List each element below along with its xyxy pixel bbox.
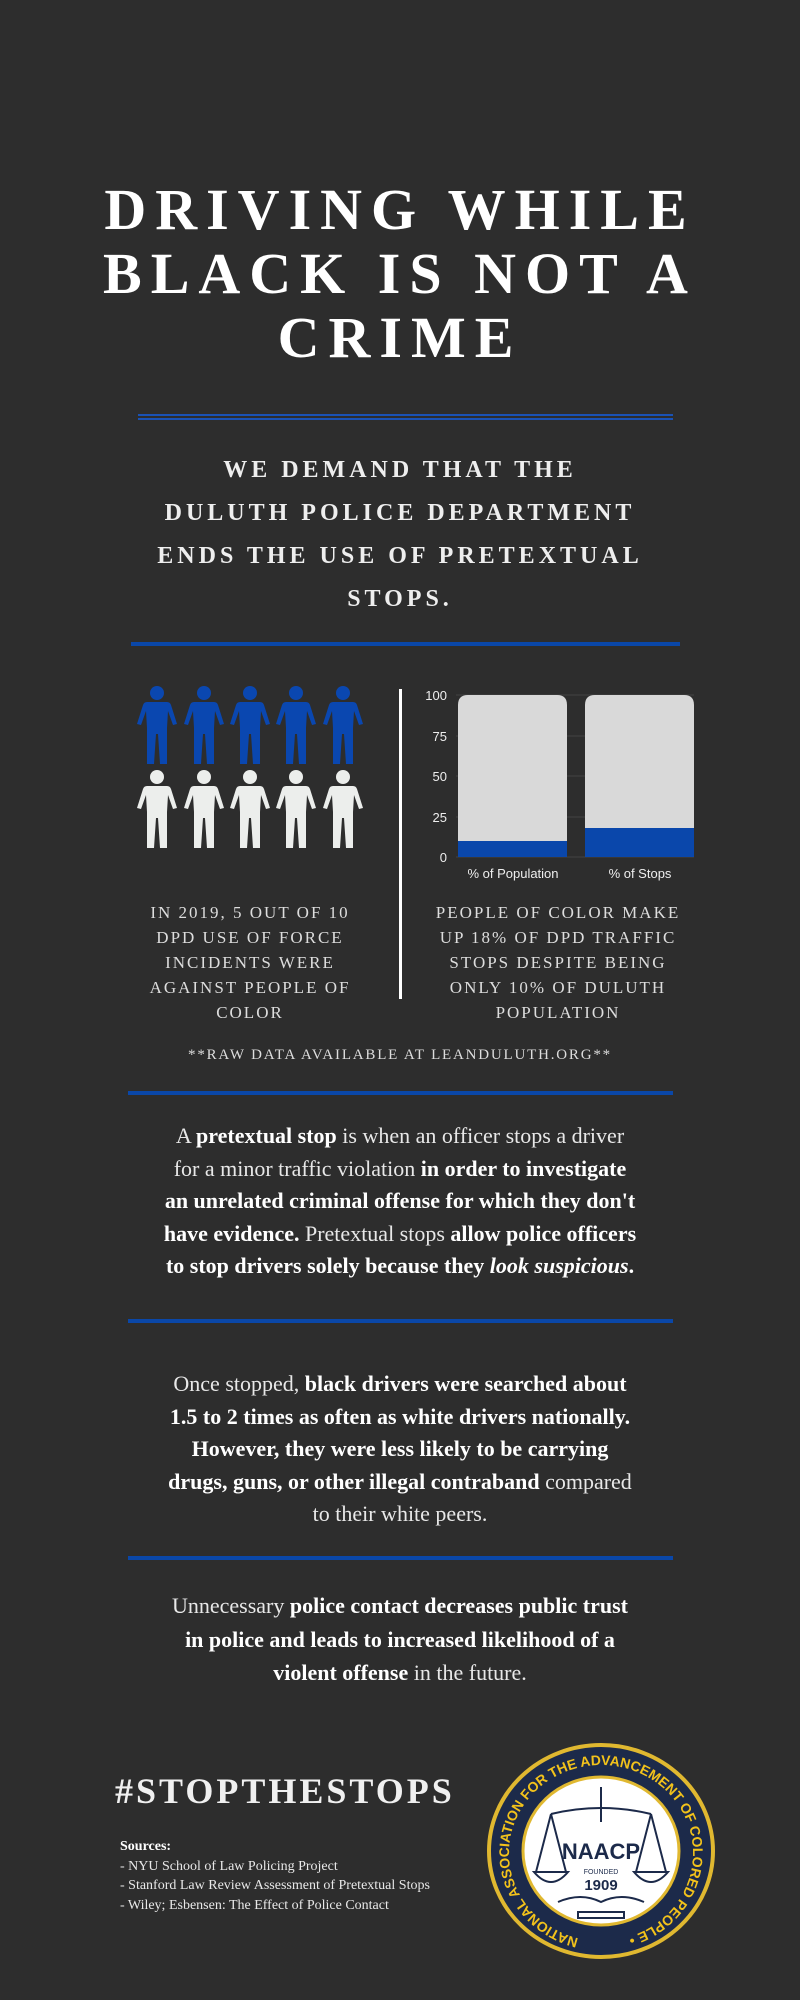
title [103, 177, 697, 370]
paragraph: search rates: Once stopped, black drivers were searched about [173, 1371, 627, 1396]
subtitle: DULUTH POLICE DEPARTMENT [165, 500, 635, 526]
subtitle: WE DEMAND THAT THE [223, 457, 577, 483]
caption left [150, 903, 350, 1022]
paragraph: pretextual stop: an unrelated criminal offense for which they don't [165, 1188, 635, 1213]
title: BLACK IS NOT A [103, 241, 697, 306]
caption right: UP 18% OF DPD TRAFFIC [440, 928, 676, 947]
paragraph: pretextual stop: to stop drivers solely because they look suspicious. [166, 1253, 634, 1278]
title: CRIME [278, 305, 522, 370]
sources: - NYU School of Law Policing Project [120, 1858, 338, 1874]
bar chart: % of Population [467, 866, 559, 881]
bar chart: 25 [433, 810, 447, 825]
caption left: COLOR [216, 1003, 284, 1022]
paragraph: pretextual stop: for a minor traffic violation in order to investigate [174, 1156, 626, 1180]
icon: people pictogram [137, 686, 363, 848]
raw data note: **RAW DATA AVAILABLE AT LEANDULUTH.ORG** [188, 1047, 612, 1063]
icon: NAACP seal: FOUNDED [584, 1869, 618, 1876]
sources [120, 1839, 430, 1912]
sources: - Stanford Law Review Assessment of Pretextual Stops [120, 1878, 430, 1893]
paragraph: public trust: violent offense in the future. [273, 1660, 527, 1685]
caption right [436, 903, 680, 1022]
caption left: DPD USE OF FORCE [156, 928, 344, 947]
paragraph: pretextual stop [164, 1123, 636, 1278]
caption right: POPULATION [496, 1003, 620, 1022]
bar chart: 50 [433, 769, 447, 784]
sources: - Wiley; Esbensen: The Effect of Police Contact [120, 1898, 389, 1912]
paragraph: public trust: in police and leads to increased likelihood of a [185, 1626, 615, 1652]
sources: Sources: [120, 1839, 171, 1854]
paragraph: search rates [168, 1371, 632, 1526]
bar chart: 75 [433, 729, 447, 744]
vertical divider [399, 689, 402, 999]
caption right: STOPS DESPITE BEING [449, 953, 667, 972]
caption right: ONLY 10% OF DULUTH [450, 978, 666, 997]
hashtag: #STOPTHESTOPS [115, 1771, 455, 1811]
bar chart: % of Stops [609, 866, 672, 881]
subtitle [157, 457, 643, 612]
paragraph: search rates: However, they were less likely to be carrying [192, 1436, 608, 1461]
bar chart: 100 [425, 688, 447, 703]
icon: NAACP seal: NAACP [562, 1839, 640, 1864]
paragraph: pretextual stop: A pretextual stop is when an officer stops a driver [176, 1123, 624, 1148]
title: DRIVING WHILE [104, 177, 696, 242]
paragraph: search rates: 1.5 to 2 times as often as white drivers nationally. [170, 1404, 630, 1428]
paragraph: search rates: to their white peers. [313, 1501, 487, 1526]
paragraph: public trust: Unnecessary police contact decreases public trust [172, 1593, 628, 1618]
caption left: AGAINST PEOPLE OF [150, 978, 350, 997]
caption right: PEOPLE OF COLOR MAKE [436, 903, 680, 922]
subtitle: STOPS. [347, 586, 453, 612]
double divider [138, 414, 673, 420]
icon: NAACP seal: NATIONAL ASSOCIATION FOR THE ADVANCEMENT OF COLORED PEOPLE • [499, 1755, 703, 1948]
caption left: IN 2019, 5 OUT OF 10 [150, 903, 350, 922]
subtitle: ENDS THE USE OF PRETEXTUAL [157, 543, 643, 569]
bar chart: 0 [440, 850, 447, 865]
paragraph: search rates: drugs, guns, or other illegal contraband compared [168, 1468, 632, 1494]
paragraph: pretextual stop: have evidence. Pretextual stops allow police officers [164, 1220, 636, 1246]
bar chart [425, 688, 694, 881]
icon: NAACP seal: 1909 [584, 1877, 618, 1894]
paragraph: public trust [172, 1593, 628, 1685]
caption left: INCIDENTS WERE [165, 953, 335, 972]
